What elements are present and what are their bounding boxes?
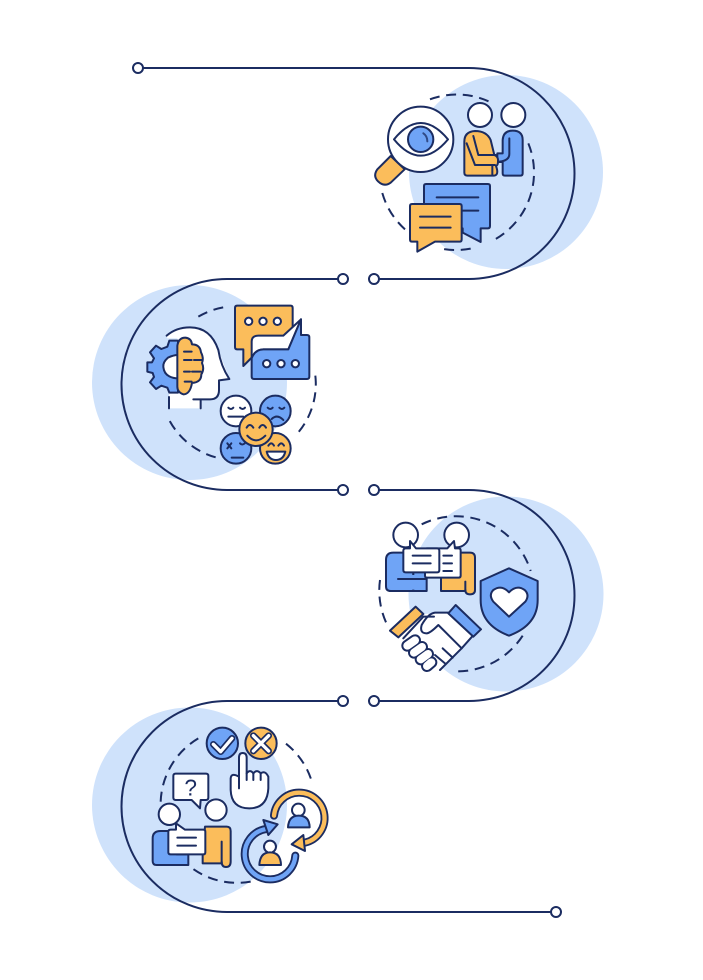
connector: step 1 curved line bbox=[133, 63, 575, 284]
icon: two people talking bbox=[464, 103, 525, 176]
icon: shield with heart bbox=[481, 568, 538, 636]
icon: emotion faces bbox=[221, 396, 291, 464]
connector: step 4 curved line bbox=[122, 696, 561, 917]
icon: two people in conversation bbox=[153, 799, 231, 867]
icon: magnifying glass with eye bbox=[375, 107, 453, 185]
icon: question speech bubble: ? bbox=[184, 775, 197, 801]
dashed ring step 4 bbox=[161, 736, 312, 883]
icon: pointing hand bbox=[231, 753, 268, 808]
dashed ring step 1 bbox=[382, 94, 534, 250]
panel: step 4 background circle bbox=[92, 708, 287, 902]
panel: step 3 background circle bbox=[408, 496, 604, 692]
icon: two people with speech bubbles bbox=[386, 523, 475, 594]
panel: step 2 background circle bbox=[92, 285, 287, 480]
icon: head with brain and gear bbox=[147, 327, 229, 408]
dashed ring step 3 bbox=[379, 516, 531, 671]
icon group: step 3 trust and agreement bbox=[379, 516, 538, 671]
icon: speech bubbles bbox=[410, 184, 490, 252]
icon: check and cross buttons bbox=[207, 728, 277, 759]
panel: step 1 background circle bbox=[409, 75, 603, 269]
icon: chat bubbles with dots bbox=[235, 306, 309, 379]
connector: step 2 curved line bbox=[122, 274, 348, 495]
connector: step 3 curved line bbox=[369, 485, 575, 706]
icon: question speech bubble bbox=[173, 774, 208, 808]
icon group: step 1 observation and conversation bbox=[375, 94, 534, 252]
dashed ring step 2 bbox=[168, 307, 316, 457]
icon group: step 2 mind and emotions bbox=[147, 306, 316, 464]
icon: handshake bbox=[390, 605, 481, 670]
icon: rotating arrows with people bbox=[245, 793, 325, 879]
icon group: step 4 choices and feedback bbox=[153, 728, 325, 883]
